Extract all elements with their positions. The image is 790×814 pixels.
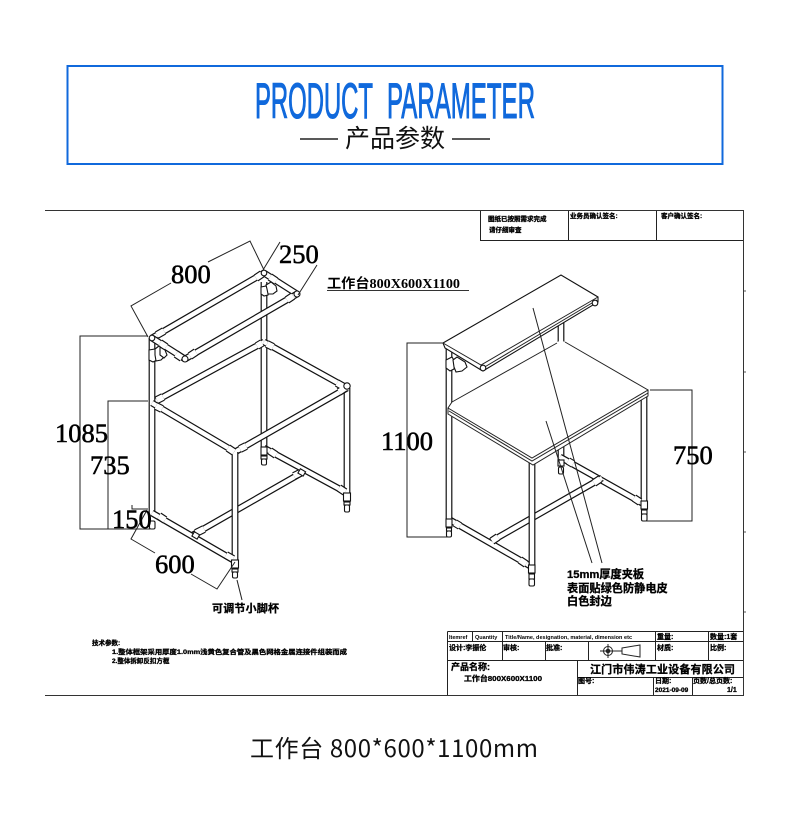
bottom right title block: 批准: bbox=[546, 643, 562, 652]
technical notes: 2.整体拆卸反扣方框 bbox=[112, 656, 170, 665]
bottom right title block bbox=[448, 632, 743, 695]
right isometric table drawing bbox=[381, 275, 713, 608]
icon: projection symbol bbox=[600, 644, 640, 658]
bottom right title block: 比例: bbox=[710, 643, 726, 652]
subheading: chinese title: 产品参数 bbox=[345, 125, 445, 153]
caption: product size: 工作台 800*600*1100mm bbox=[250, 729, 538, 764]
bottom right title block: Itemref bbox=[449, 635, 468, 641]
header panel bbox=[68, 66, 722, 164]
technical notes: 技术参数: bbox=[92, 638, 120, 647]
bottom right title block: 重量: bbox=[657, 632, 673, 641]
material note: 表面贴绿色防静电皮 bbox=[567, 581, 668, 595]
material note: 15mm厚度夹板 bbox=[567, 567, 644, 581]
upper shelf bbox=[443, 275, 598, 372]
bottom right title block: 日期: bbox=[655, 676, 671, 685]
dimension labels: 735 bbox=[90, 450, 130, 480]
drawing frame bbox=[45, 210, 746, 696]
bottom right title block: 图号: bbox=[578, 677, 594, 685]
dimension labels: 250 bbox=[279, 239, 319, 269]
top right approval table: 业务员确认签名: bbox=[570, 211, 618, 220]
bottom right title block: 2021-09-09 bbox=[655, 687, 689, 694]
dimension labels bbox=[381, 426, 713, 470]
top right approval table: 客户确认签名: bbox=[661, 211, 702, 220]
dimension labels: 150 bbox=[112, 504, 152, 534]
top right approval table: 图纸已按照需求完成 bbox=[488, 214, 547, 223]
lower table top bbox=[448, 340, 648, 465]
technical notes: 1.整体框架采用厚度1.0mm浅黄色复合管及黑色网格金属连接件组装而成 bbox=[112, 647, 348, 656]
dimension labels: 750 bbox=[673, 440, 713, 470]
dimension labels: 600 bbox=[155, 549, 195, 579]
dimension labels: 1085 bbox=[55, 418, 108, 448]
bottom right title block: 1/1 bbox=[727, 687, 737, 694]
bottom right title block: 材质: bbox=[657, 643, 673, 652]
foot label: 可调节小脚杯 bbox=[212, 601, 279, 615]
dimension lines bbox=[407, 343, 692, 537]
engineering drawing panel bbox=[45, 210, 746, 696]
material note: 白色封边 bbox=[567, 594, 612, 608]
table frame tubes bbox=[449, 322, 644, 570]
bottom right title block: 审核: bbox=[503, 643, 519, 652]
bottom right title block: Title/Name, designation, material, dimension etc bbox=[505, 635, 632, 641]
bottom right title block: 数量:1套 bbox=[710, 632, 737, 641]
heading: product parameter: PRODUCT bbox=[255, 73, 373, 129]
table collars and feet bbox=[446, 460, 648, 586]
material leader lines bbox=[533, 308, 602, 563]
frame tubes bbox=[152, 273, 347, 563]
bottom right title block: 工作台800X600X1100 bbox=[464, 673, 542, 683]
left isometric frame drawing bbox=[55, 239, 469, 615]
dimension lines bbox=[80, 241, 317, 600]
tube collars and joints bbox=[149, 270, 350, 559]
dimension labels: 800 bbox=[171, 259, 211, 289]
bottom right title block: 页数/总页数: bbox=[693, 676, 732, 685]
bottom right title block: 产品名称: bbox=[451, 661, 490, 672]
technical notes bbox=[92, 638, 348, 665]
top right approval table bbox=[480, 211, 743, 240]
top right approval table: 请仔细审查 bbox=[489, 225, 522, 234]
dimension labels bbox=[55, 239, 319, 579]
bottom right title block: 设计:李振伦 bbox=[449, 643, 486, 652]
dimension labels: 1100 bbox=[381, 426, 433, 456]
material note bbox=[567, 567, 668, 608]
adjustable feet bbox=[150, 447, 350, 578]
drawing caption: 工作台800X600X1100 bbox=[327, 275, 460, 291]
bottom right title block: 江门市伟涛工业设备有限公司 bbox=[590, 662, 735, 676]
header panel: PARAMETER bbox=[387, 73, 535, 129]
bottom right title block: Quantity bbox=[475, 635, 498, 641]
